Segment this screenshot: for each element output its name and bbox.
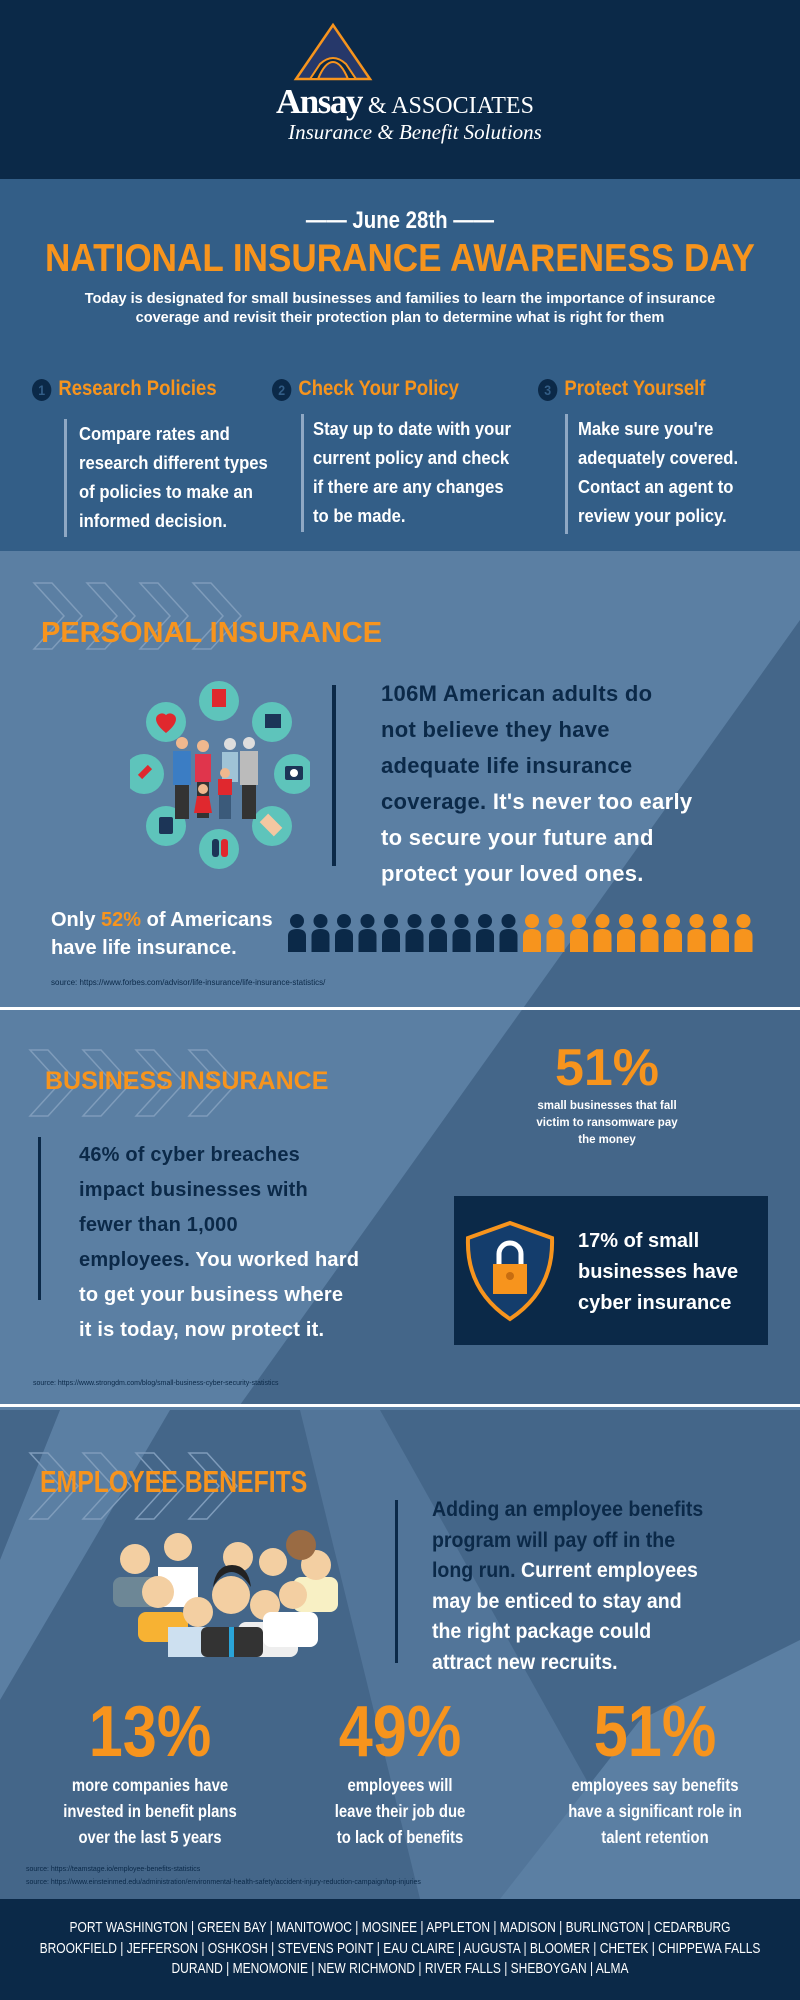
- stat text: 106M American adults do: [381, 681, 652, 706]
- sources: source: https://teamstage.io/employee-benefits-statistics: [26, 1866, 200, 1873]
- stat: 52%: Only 52% of Americans: [51, 909, 273, 931]
- stat: 51% ransomware: small businesses that fall victim to ransomware pay the money: [536, 1100, 678, 1146]
- logo icon: [294, 22, 372, 80]
- tagline: Insurance & Benefit Solutions: [288, 120, 542, 144]
- divider: [332, 685, 336, 866]
- step 2: Stay up to date with your: [313, 418, 511, 439]
- stat: 13%: more companies have invested in benefit plans over the last 5 years: [63, 1775, 237, 1847]
- step 2: to be made.: [313, 505, 406, 526]
- stat: 49%: employees will leave their job due to lack of benefits: [335, 1775, 465, 1847]
- description: coverage and revisit their protection plan to determine what is right for them: [136, 309, 664, 326]
- text block: to get your business where: [79, 1284, 343, 1306]
- stat: 49%: [335, 1692, 465, 1847]
- panel: personal insurance: [32, 582, 752, 987]
- step 1: of policies to make an: [79, 481, 253, 502]
- chevron decoration: [28, 1452, 238, 1520]
- stat: 51% ransomware: [536, 1039, 678, 1146]
- source: source: https://www.strongdm.com/blog/small-business-cyber-security-statistics: [33, 1380, 278, 1387]
- footer: locations: BROOKFIELD | JEFFERSON | OSHKOSH | STEVENS POINT | EAU CLAIRE | AUGUSTA | BLOOMER | CHETEK | CHIPPEWA FALLS: [40, 1940, 760, 1956]
- pictogram: people: [288, 914, 752, 952]
- panel: awareness day: [0, 179, 800, 551]
- stat: 52%: [51, 909, 273, 959]
- text block: attract new recruits.: [432, 1650, 618, 1674]
- stat: 51%: 51%: [594, 1692, 716, 1772]
- panel: business insurance: [28, 1039, 768, 1387]
- stat: 13%: [63, 1692, 237, 1847]
- step 3: Make sure you're: [578, 418, 713, 439]
- stat text: protect your loved ones.: [381, 861, 644, 886]
- sources: source: https://www.einsteinmed.edu/administration/environmental-health-safety/accident-injury-reduction-campaign/top-injuries: [26, 1879, 421, 1886]
- step 3: Contact an agent to: [578, 476, 733, 497]
- stat: 49%: 49%: [339, 1692, 461, 1772]
- text block: impact businesses with: [79, 1179, 308, 1201]
- heading: EMPLOYEE BENEFITS: [40, 1464, 307, 1499]
- chevron decoration: [28, 1049, 234, 1117]
- text block: long run. Current employees: [432, 1559, 698, 1582]
- step 3: 3: [544, 382, 551, 398]
- divider: [395, 1500, 398, 1663]
- callout: cyber insurance: [454, 1196, 768, 1345]
- stat text: not believe they have: [381, 717, 610, 742]
- panel: employee benefits: [26, 1452, 742, 1886]
- step 1: 1: [38, 382, 45, 398]
- chevron decoration: [32, 582, 242, 650]
- step 2: 2: [278, 382, 285, 398]
- description: Today is designated for small businesses and families to learn the importance of insurance: [85, 290, 715, 307]
- logo text: Ansay & ASSOCIATES: [276, 82, 534, 121]
- source: source: https://www.forbes.com/advisor/life-insurance/life-insurance-statistics/: [51, 978, 325, 987]
- stat text: coverage. It's never too early: [381, 789, 692, 814]
- step 3: adequately covered.: [578, 447, 738, 468]
- footer: locations: DURAND | MENOMONIE | NEW RICHMOND | RIVER FALLS | SHEBOYGAN | ALMA: [172, 1960, 628, 1977]
- stat: 13%: 13%: [89, 1692, 211, 1772]
- divider: [38, 1137, 41, 1300]
- step 3: Protect Yourself: [564, 377, 705, 400]
- step 2: [272, 377, 511, 532]
- text block: program will pay off in the: [432, 1528, 675, 1552]
- heading: PERSONAL INSURANCE: [41, 617, 382, 649]
- step 3: review your policy.: [578, 505, 727, 526]
- step 1: informed decision.: [79, 510, 227, 531]
- text block: [79, 1144, 359, 1341]
- callout: cyber insurance: 17% of small businesses have cyber insurance: [578, 1230, 738, 1314]
- stat: 51% ransomware: 51%: [555, 1039, 659, 1097]
- step 2: current policy and check: [313, 447, 509, 468]
- footer: locations: [0, 1899, 800, 2000]
- stat text: [381, 681, 692, 886]
- text block: 46% of cyber breaches: [79, 1144, 300, 1166]
- text block: [432, 1498, 703, 1674]
- text block: the right package could: [432, 1620, 651, 1643]
- icon: group of employees: [113, 1530, 338, 1657]
- text block: it is today, now protect it.: [79, 1319, 324, 1341]
- footer: locations: PORT WASHINGTON | GREEN BAY | MANITOWOC | MOSINEE | APPLETON | MADISON | BURLINGTON | CEDARBURG: [69, 1919, 731, 1936]
- step 1: Compare rates and: [79, 423, 230, 444]
- text block: Adding an employee benefits: [432, 1498, 703, 1521]
- step 1: [32, 377, 268, 537]
- step 2: if there are any changes: [313, 476, 504, 497]
- title: NATIONAL INSURANCE AWARENESS DAY: [45, 237, 755, 280]
- icon: shield lock: [466, 1220, 554, 1322]
- step 1: Research Policies: [58, 377, 217, 400]
- stat text: adequate life insurance: [381, 753, 632, 778]
- sources: [26, 1866, 421, 1886]
- text block: may be enticed to stay and: [432, 1590, 682, 1612]
- date: —— June 28th ——: [306, 207, 494, 234]
- header: [0, 0, 800, 179]
- text block: fewer than 1,000: [79, 1214, 238, 1236]
- text block: employees. You worked hard: [79, 1249, 359, 1271]
- step 3: [538, 377, 738, 534]
- stat text: to secure your future and: [381, 825, 654, 850]
- stat: 51%: employees say benefits have a significant role in talent retention: [568, 1775, 742, 1847]
- icon: family with health icons: [130, 681, 310, 869]
- step 2: Check Your Policy: [298, 377, 459, 400]
- heading: BUSINESS INSURANCE: [45, 1067, 328, 1095]
- stat: 51%: [568, 1692, 742, 1847]
- stat: 52%: have life insurance.: [51, 937, 237, 959]
- step 1: research different types: [79, 452, 268, 473]
- description: [84, 290, 715, 326]
